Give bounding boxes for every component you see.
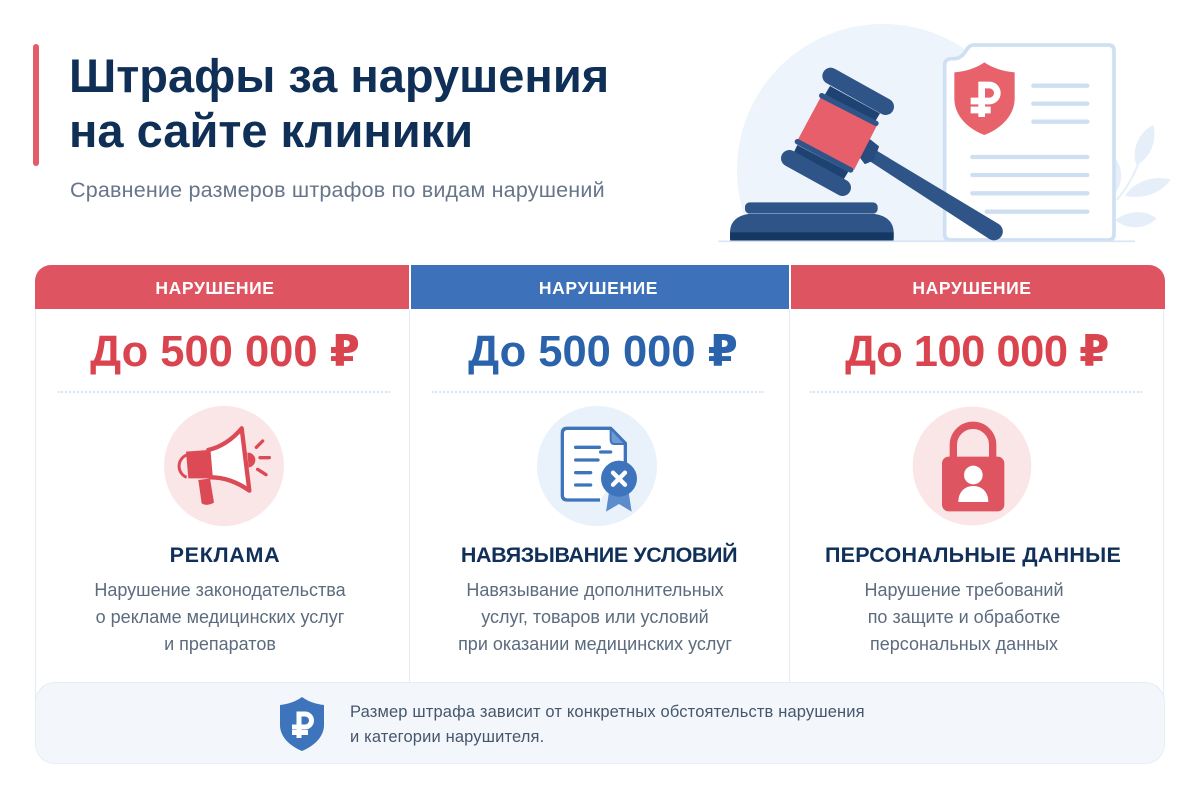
illustration: gavel and document — [718, 24, 1170, 242]
icon: padlock with person — [912, 406, 1032, 526]
icon: document with cross seal — [537, 406, 657, 526]
document — [945, 45, 1114, 240]
column 3 amount: До 100 000 ₽ — [845, 328, 1109, 376]
title — [69, 49, 609, 157]
column 3 header: НАРУШЕНИЕ — [912, 278, 1032, 298]
column 3 header — [791, 265, 1165, 309]
column 2 header — [411, 265, 789, 309]
panel: comparison table — [35, 265, 1164, 705]
subtitle: Сравнение размеров штрафов по видам нарушений — [70, 178, 605, 202]
column 1 description: и препаратов — [164, 634, 276, 654]
column 3 description: Нарушение требований — [864, 580, 1064, 600]
column 2 header: НАРУШЕНИЕ — [539, 278, 658, 298]
column 3 description: персональных данных — [870, 634, 1058, 654]
column 1 header — [35, 265, 409, 309]
icon: ruble shield — [280, 697, 324, 751]
footer note panel — [35, 682, 1165, 764]
document shield — [954, 62, 1015, 135]
column 2 description: при оказании медицинских услуг — [458, 634, 732, 654]
footer note text: и категории нарушителя. — [350, 728, 544, 746]
column 2 amount: До 500 000 ₽ — [468, 328, 738, 376]
handle — [870, 151, 1003, 240]
column 1 amount: До 500 000 ₽ — [90, 328, 360, 376]
column 2 name: НАВЯЗЫВАНИЕ УСЛОВИЙ — [461, 543, 737, 567]
column 3 description — [864, 580, 1064, 654]
title: на сайте клиники — [69, 104, 473, 157]
column 2 description: услуг, товаров или условий — [481, 607, 709, 627]
icon: megaphone — [164, 406, 284, 526]
column 3 name: ПЕРСОНАЛЬНЫЕ ДАННЫЕ — [825, 543, 1121, 567]
column 1 description: о рекламе медицинских услуг — [96, 607, 344, 627]
column 1 description — [94, 580, 346, 654]
column 3 description: по защите и обработке — [868, 607, 1060, 627]
accent bar — [33, 44, 39, 166]
document lines — [972, 86, 1087, 212]
column 1 header: НАРУШЕНИЕ — [155, 278, 275, 298]
column 2 description: Навязывание дополнительных — [466, 580, 724, 600]
leaves — [1114, 125, 1171, 227]
floor line — [718, 239, 1135, 244]
title: Штрафы за нарушения — [69, 49, 609, 102]
hammer head — [825, 86, 880, 122]
column 1 name: РЕКЛАМА — [170, 543, 280, 567]
footer note text: Размер штрафа зависит от конкретных обстоятельств нарушения — [350, 703, 865, 721]
column 1 description: Нарушение законодательства — [94, 580, 346, 600]
footer note text — [350, 703, 865, 746]
column 2 description — [458, 580, 732, 654]
sound block — [745, 202, 878, 214]
background circle — [737, 24, 1029, 316]
